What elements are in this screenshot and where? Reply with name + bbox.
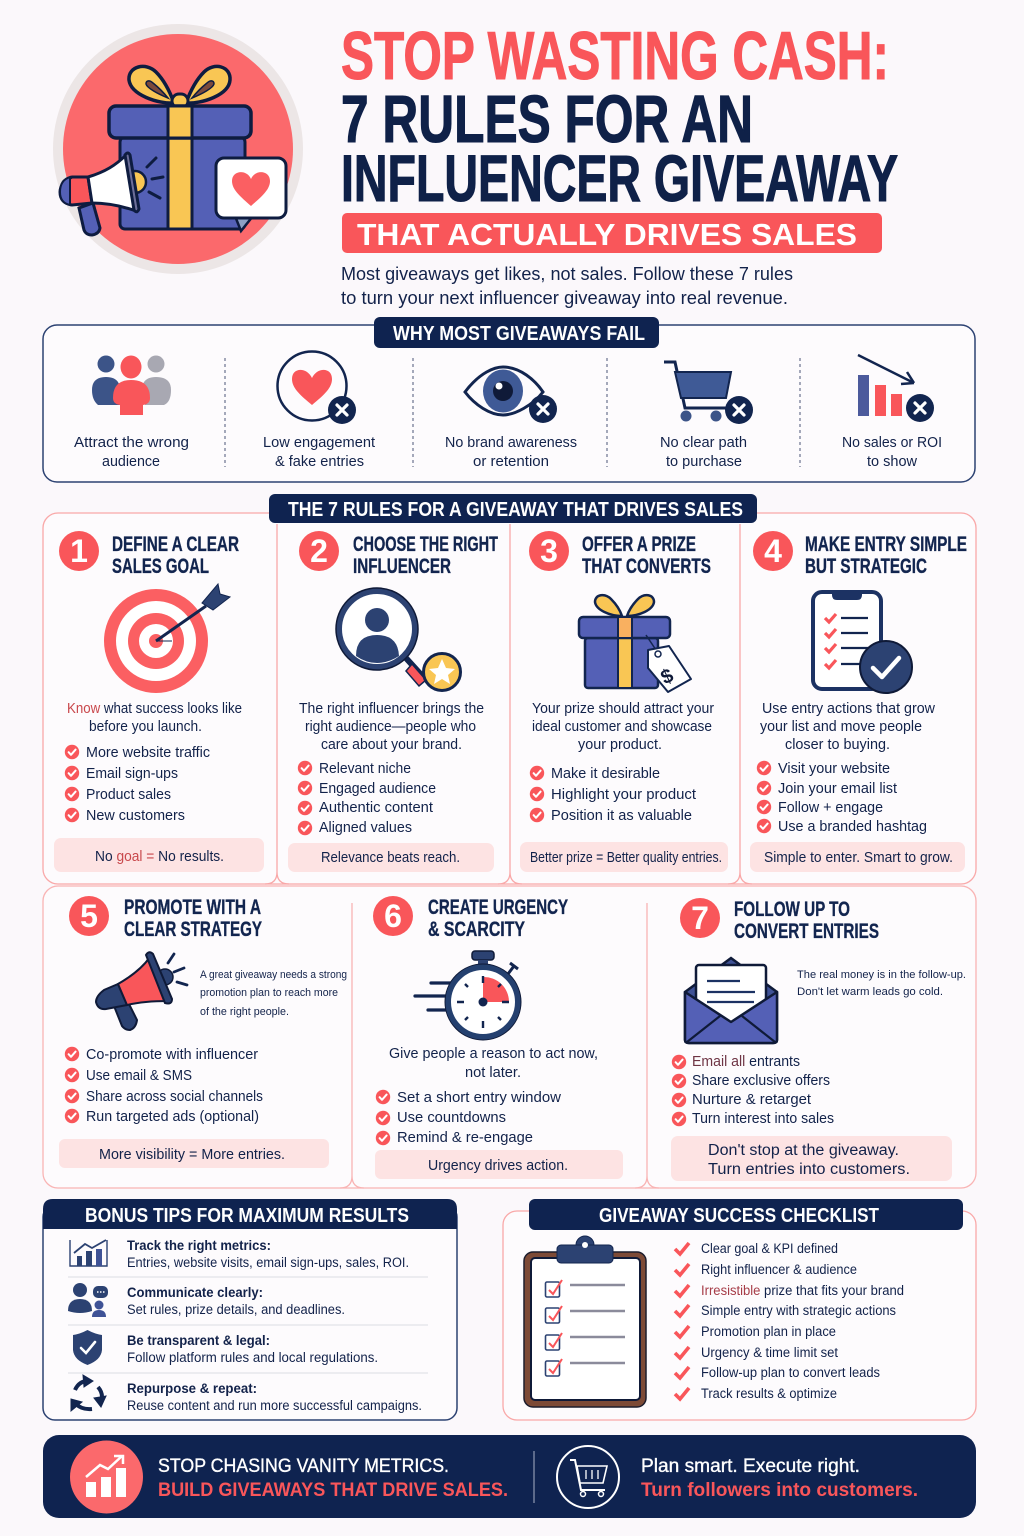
fail label: low engagement [263,435,375,470]
icon: magnifier with person and star [336,588,460,690]
panel: giveaway success checklist [503,1199,976,1420]
icon: growth chart badge [70,1440,143,1514]
panel frame: rules 1 to 4 [43,513,976,884]
icon: target with arrow [104,584,230,693]
rule 6 description: Give people a reason to act now, [389,1046,598,1062]
tip: track metrics [127,1238,409,1270]
rule 3 panel [520,531,728,872]
rule 7 description: Don't let warm leads go cold. [797,986,943,998]
rule 2 checklist [298,761,436,836]
rule 2 heading: CHOOSE THE RIGHT [353,533,498,556]
rule 7 heading [734,898,879,943]
rule 2 checklist: Authentic content [319,800,433,816]
rule 7 description: The real money is in the follow-up. [797,969,966,981]
rule 2 heading: INFLUENCER [353,555,451,578]
rule 1 checklist: More website traffic [86,745,210,761]
rule 2 description [299,701,484,753]
fail label: no sales or roi: to show [867,454,918,470]
rule 2 description: care about your brand. [321,737,462,753]
rule 7 checklist: Nurture & retarget [692,1092,811,1108]
rule 4 callout [750,842,965,872]
footer message right: Plan smart. Execute right. [641,1456,860,1477]
rule 7 checklist [672,1054,834,1127]
fail label: no brand awareness: or retention [473,454,549,470]
intro text: Most giveaways get likes, not sales. Follow these 7 rules [341,264,793,284]
fail label: no sales or roi [842,435,942,470]
fail label: no clear path: to purchase [666,454,742,470]
rule 4 heading [805,533,967,578]
icon: cart badge [557,1446,619,1508]
rule 4 checklist [757,761,927,835]
tip: be transparent [127,1333,378,1365]
tip: communicate clearly [127,1285,345,1317]
rule 5 heading: CLEAR STRATEGY [124,918,262,941]
rule 1 heading: DEFINE A CLEAR [112,533,239,556]
fail label: no brand awareness: No brand awareness [445,435,577,451]
rule 5 callout [59,1139,329,1168]
section heading: why most giveaways fail [374,317,659,348]
rule 6 checklist: Remind & re-engage [397,1130,533,1146]
icon: wrong audience people [92,356,171,415]
fail label: wrong audience [74,435,189,470]
rule 3 heading: OFFER A PRIZE [582,533,696,556]
rule 3 checklist: Position it as valuable [551,808,692,824]
rule 6 panel [373,896,623,1179]
rule 7 description [797,969,966,998]
icon: people communicating [68,1283,108,1317]
rule 4 description: your list and move people [760,719,922,735]
rule 4 description [760,701,936,753]
rule 7 callout: Turn entries into customers. [708,1161,910,1178]
rule 5 checklist: Run targeted ads (optional) [86,1109,259,1125]
rule 1 description: before you launch. [89,719,202,735]
icon: metrics chart [70,1240,107,1266]
fail label: no clear path [660,435,747,470]
rule 6 checklist: Set a short entry window [397,1090,562,1106]
number badge 5 [69,896,109,936]
rule 2 checklist: Relevant niche [319,761,411,777]
section heading: the 7 rules [269,494,757,523]
rule 6 description: not later. [465,1065,521,1081]
rule 5 checklist: Co-promote with influencer [86,1047,258,1063]
tip: be transparent: Be transparent & legal: [127,1333,270,1348]
rule 1 description [67,701,242,735]
rule 5 description: of the right people. [200,1006,289,1018]
rule 1 callout: No goal = No results. [95,849,224,865]
rule 4 description: Use entry actions that grow [762,701,936,717]
rule 5 panel [59,896,347,1168]
rule 4 heading: BUT STRATEGIC [805,555,927,578]
rule 7 panel [671,898,966,1181]
intro text: to turn your next influencer giveaway into real revenue. [341,288,788,308]
rule 4 panel [750,531,967,872]
number badge 7: 7 [691,900,709,936]
rule 1 checklist [65,745,210,824]
rule 5 checklist: Use email & SMS [86,1068,192,1084]
fail label: no clear path: No clear path [660,435,747,451]
rule 2 panel [288,531,498,872]
rule 4 checklist: Follow + engage [778,800,883,816]
rule 3 description [532,701,714,753]
tip: track metrics: Track the right metrics: [127,1238,271,1253]
rule 6 callout [375,1150,623,1179]
number badge 3 [529,531,569,571]
bonus tips heading: BONUS TIPS FOR MAXIMUM RESULTS [85,1205,409,1227]
footer message left: BUILD GIVEAWAYS THAT DRIVE SALES. [158,1480,508,1501]
icon: shield [73,1330,102,1365]
icon: eye with x [465,367,557,423]
number badge 6: 6 [384,898,402,934]
rule 1 callout [54,838,264,872]
rule 1 checklist: Product sales [86,787,171,803]
subtitle banner: THAT ACTUALLY DRIVES SALES [357,217,857,252]
footer message right: Turn followers into customers. [641,1480,918,1501]
checklist items: Clear goal & KPI defined [701,1241,838,1256]
icon: gift with price tag: $ [658,665,677,689]
rule 1 heading: SALES GOAL [112,555,209,578]
rule 5 description [200,969,347,1018]
rule 2 checklist: Engaged audience [319,781,436,797]
icon: gift with price tag [579,595,691,692]
rule 3 checklist [530,766,696,824]
rule 5 description: A great giveaway needs a strong [200,969,347,981]
rule 3 callout [520,842,728,872]
number badge 3: 3 [540,533,558,569]
checklist items [675,1241,904,1401]
footer message left: STOP CHASING VANITY METRICS. [158,1456,449,1477]
footer message left [158,1456,508,1501]
rule 1 description: Know what success looks like [67,701,242,717]
tip: be transparent: Follow platform rules and local regulations. [127,1350,378,1365]
rule 5 checklist [65,1047,263,1125]
rule 5 heading: PROMOTE WITH A [124,896,261,919]
rule 3 heading [582,533,711,578]
tip: repurpose [127,1381,422,1413]
rule 6 heading: CREATE URGENCY [428,896,568,919]
rule 2 callout [288,843,494,872]
rule 4 description: closer to buying. [785,737,890,753]
checklist items: Irresistible prize that fits your brand [701,1283,904,1298]
rule 5 description: promotion plan to reach more [200,987,338,999]
rule 4 checklist: Join your email list [778,781,897,797]
rule 3 description: Your prize should attract your [532,701,714,717]
number badge 2 [299,531,339,571]
checklist items: Right influencer & audience [701,1262,857,1277]
checklist heading [529,1199,963,1230]
rule 3 description: your product. [578,737,662,753]
rule 2 heading [353,533,498,578]
number badge 6 [373,896,413,936]
checklist items: Follow-up plan to convert leads [701,1365,880,1380]
rule 3 callout: Better prize = Better quality entries. [530,850,722,866]
rule 7 heading: CONVERT ENTRIES [734,920,879,943]
number badge 1: 1 [70,533,88,569]
rule 3 description: ideal customer and showcase [532,719,712,735]
title [341,18,898,215]
section heading: the 7 rules: THE 7 RULES FOR A GIVEAWAY THAT DRIVES SALES [288,499,743,521]
fail label: wrong audience: Attract the wrong [74,435,189,451]
fail label: no sales or roi: No sales or ROI [842,435,942,451]
rule 4 checklist: Use a branded hashtag [778,819,927,835]
rule 6 checklist: Use countdowns [397,1110,506,1126]
checklist items: Urgency & time limit set [701,1345,838,1360]
checklist heading: GIVEAWAY SUCCESS CHECKLIST [599,1205,879,1227]
rule 7 checklist: Share exclusive offers [692,1073,830,1089]
number badge 1 [59,531,99,571]
rule 2 description: right audience—people who [305,719,476,735]
rule 7 heading: FOLLOW UP TO [734,898,850,921]
checklist items: Simple entry with strategic actions [701,1303,896,1318]
tip: repurpose: Reuse content and run more successful campaigns. [127,1398,422,1413]
fail label: no brand awareness [445,435,577,470]
rule 6 heading: & SCARCITY [428,918,525,941]
rule 3 checklist: Highlight your product [551,787,696,803]
section heading: why most giveaways fail: WHY MOST GIVEAWAYS FAIL [393,323,645,345]
panel: bonus tips [43,1199,457,1420]
rule 6 description [389,1046,598,1081]
rule 2 checklist: Aligned values [319,820,412,836]
rule 1 checklist: New customers [86,808,185,824]
rule 1 panel [54,531,264,872]
tip: repurpose: Repurpose & repeat: [127,1381,257,1396]
icon: repurpose arrows [71,1375,106,1411]
checklist items: Track results & optimize [701,1386,837,1401]
rule 6 checklist [376,1090,562,1146]
rule 4 checklist: Visit your website [778,761,890,777]
icon: megaphone [96,952,187,1030]
rule 3 checklist: Make it desirable [551,766,660,782]
tip: communicate clearly: Set rules, prize details, and deadlines. [127,1302,345,1317]
number badge 4 [753,531,793,571]
icon: open envelope with letter [685,958,777,1043]
rule 6 callout: Urgency drives action. [428,1158,568,1174]
number badge 2: 2 [310,533,328,569]
tip: communicate clearly: Communicate clearly: [127,1285,263,1300]
panel frame: rules 5 to 7 [43,886,976,1188]
rule 2 callout: Relevance beats reach. [321,850,460,866]
rule 7 callout [671,1136,952,1181]
panel: why most giveaways fail [43,317,975,482]
rule 1 checklist: Email sign-ups [86,766,178,782]
rule 4 callout: Simple to enter. Smart to grow. [764,850,953,866]
icon: stopwatch [415,951,521,1040]
rule 3 heading: THAT CONVERTS [582,555,711,578]
rule 7 checklist: Email all entrants [692,1054,800,1070]
rule 4 heading: MAKE ENTRY SIMPLE [805,533,967,556]
number badge 7 [680,898,720,938]
rule 5 callout: More visibility = More entries. [99,1147,285,1163]
hero illustration: gift, megaphone and heart bubble [53,24,303,274]
rule 5 heading [124,896,262,941]
rule 7 callout: Don't stop at the giveaway. [708,1142,899,1159]
tip: track metrics: Entries, website visits, email sign-ups, sales, ROI. [127,1255,409,1270]
rule 1 heading [112,533,239,578]
rule 5 checklist: Share across social channels [86,1089,263,1105]
footer banner [43,1435,976,1518]
icon: heart with x [278,352,356,424]
fail label: low engagement: Low engagement [263,435,375,451]
title: 7 RULES FOR AN [341,82,753,157]
icon: declining bar chart with x [858,355,934,422]
number badge 5: 5 [80,898,98,934]
rule 2 description: The right influencer brings the [299,701,484,717]
icon: clipboard [524,1236,646,1407]
intro text [341,264,793,308]
footer message right [641,1456,918,1501]
checklist items: Promotion plan in place [701,1324,836,1339]
fail label: low engagement: & fake entries [275,454,364,470]
rule 7 checklist: Turn interest into sales [692,1111,834,1127]
number badge 4: 4 [764,533,782,569]
bonus tips heading [43,1199,457,1229]
icon: phone checklist with check badge [813,592,912,693]
fail label: wrong audience: audience [102,454,160,470]
icon: shopping cart with x [664,362,753,424]
rule 6 heading [428,896,568,941]
